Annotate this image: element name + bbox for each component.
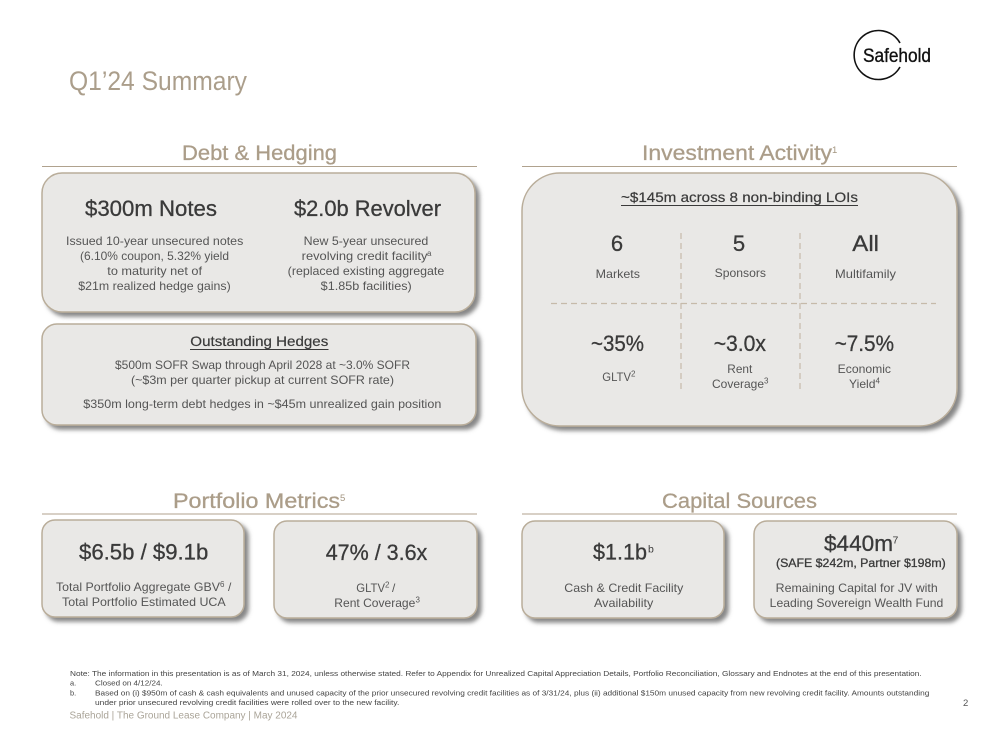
availability figure: $1.1b — [593, 540, 647, 564]
metric: economic yield: Economic — [838, 362, 891, 376]
JV description — [770, 581, 943, 610]
metric: rent coverage: 3 — [764, 376, 769, 386]
logo: Safehold: Safehold — [863, 46, 931, 67]
panel: notes and revolver — [42, 173, 475, 312]
GLTV description: Rent Coverage — [334, 596, 416, 610]
footnotes: b. — [70, 688, 76, 698]
metric: multifamily: All — [852, 231, 879, 256]
LOI heading: ~$145m across 8 non-binding LOIs — [621, 189, 858, 205]
panel: JV capital — [754, 521, 957, 618]
metric: GLTV: GLTV — [602, 370, 631, 384]
revolver description: revolving credit facility — [302, 249, 428, 263]
GLTV description: 2 — [385, 580, 390, 590]
metric: markets — [596, 231, 640, 281]
footnotes: a. — [70, 678, 76, 688]
section heading: Portfolio Metrics: 5 — [340, 493, 345, 504]
revolver figure: $2.0b Revolver — [294, 196, 441, 221]
GLTV description: GLTV — [356, 581, 385, 595]
notes figure: $300m Notes — [85, 196, 217, 221]
GBV description — [56, 580, 232, 609]
JV figure: $440m — [824, 531, 893, 556]
section heading: Portfolio Metrics: Portfolio Metrics — [173, 490, 340, 513]
section heading: Portfolio Metrics — [42, 490, 477, 514]
footnotes — [70, 669, 929, 707]
metric: rent coverage: Coverage — [712, 377, 764, 391]
revolver description — [288, 234, 445, 293]
panel: GBV and UCA — [42, 520, 244, 617]
GBV description: 6 — [220, 580, 225, 589]
hedges text: (~$3m per quarter pickup at current SOFR rate) — [131, 373, 394, 387]
metric: economic yield — [835, 331, 894, 391]
section heading: Investment Activity: Investment Activity — [642, 142, 833, 165]
metric: markets: 6 — [611, 231, 623, 256]
JV split: (SAFE $242m, Partner $198m) — [776, 556, 946, 570]
notes description: to maturity net of — [107, 264, 203, 278]
section heading: Investment Activity — [522, 142, 957, 166]
notes description — [66, 234, 243, 293]
revolver description: a — [427, 249, 432, 258]
footer: Safehold | The Ground Lease Company | May 2024 — [70, 710, 298, 722]
metric: economic yield: 4 — [876, 376, 880, 386]
hedges text: $500m SOFR Swap through April 2028 at ~3.0% SOFR — [115, 358, 410, 372]
page number: 2 — [963, 698, 968, 709]
section heading: Debt & Hedging: Debt & Hedging — [182, 142, 337, 165]
notes description: $21m realized hedge gains) — [78, 279, 231, 293]
metric: GLTV — [591, 331, 644, 384]
GLTV figure: 47% / 3.6x — [326, 540, 427, 565]
JV figure: 7 — [892, 534, 898, 546]
JV description: Leading Sovereign Wealth Fund — [770, 596, 943, 610]
metric: GLTV: 2 — [631, 370, 636, 378]
metric: rent coverage: Rent — [727, 362, 753, 376]
hedges heading: Outstanding Hedges — [190, 333, 328, 349]
revolver description: (replaced existing aggregate — [288, 264, 445, 278]
footnotes: Based on (i) $950m of cash & cash equivalents and unused capacity of the prior unsecured revolving credit facilities as of 3/31/24, plus (ii) additional $150m unused capacity from new revolving credit facility. Amounts outstanding — [95, 688, 929, 698]
metric: rent coverage: ~3.0x — [714, 331, 766, 356]
GBV description: Total Portfolio Estimated UCA — [62, 595, 226, 609]
panel: GLTV and rent coverage — [274, 521, 477, 618]
panel: cash and credit availability — [522, 521, 724, 618]
panel: investment activity — [522, 173, 957, 426]
metric: GLTV: ~35% — [591, 331, 644, 356]
metric: markets: Markets — [596, 267, 640, 281]
metric: sponsors — [715, 231, 766, 280]
revolver description: $1.85b facilities) — [321, 279, 412, 293]
availability description: Cash & Credit Facility — [564, 581, 683, 595]
section heading: Capital Sources: Capital Sources — [662, 490, 817, 513]
panel: outstanding hedges — [42, 324, 476, 425]
availability figure: b — [648, 544, 654, 556]
footnotes: Note: The information in this presentation is as of March 31, 2024, unless otherwise stated. Refer to Appendix for Unrealized Capital Appreciation Details, Portfolio Reconciliation, Glossary and Endnotes at the end of this presentation. — [70, 669, 922, 678]
availability description — [564, 581, 683, 610]
metric: sponsors: Sponsors — [715, 266, 766, 280]
GLTV description — [334, 580, 420, 610]
metric: economic yield: ~7.5% — [835, 331, 894, 356]
revolver description: New 5-year unsecured — [304, 234, 428, 248]
hedges text: $350m long-term debt hedges in ~$45m unrealized gain position — [83, 397, 441, 411]
JV description: Remaining Capital for JV with — [776, 581, 938, 595]
metric: multifamily: Multifamily — [835, 267, 896, 281]
GBV description: / — [228, 580, 232, 594]
footnotes: Closed on 4/12/24. — [95, 678, 163, 688]
GBV description: Total Portfolio Aggregate GBV — [56, 580, 220, 594]
hedges text — [83, 358, 441, 411]
notes description: Issued 10-year unsecured notes — [66, 234, 243, 248]
footnotes: under prior unsecured revolving credit facilities were rolled over to the new facility. — [95, 698, 399, 707]
title: Q1’24 Summary — [69, 66, 247, 96]
GBV figure: $6.5b / $9.1b — [79, 540, 208, 564]
notes description: (6.10% coupon, 5.32% yield — [80, 249, 229, 263]
dashed grid — [551, 233, 936, 392]
availability description: Availability — [594, 596, 653, 610]
metric: multifamily — [835, 231, 896, 281]
metric: rent coverage — [712, 331, 769, 391]
logo: Safehold — [854, 30, 931, 80]
metric: sponsors: 5 — [733, 231, 745, 256]
GLTV description: 3 — [416, 596, 420, 604]
metric: economic yield: Yield — [849, 377, 876, 391]
section heading: Investment Activity: 1 — [832, 145, 837, 156]
GLTV description: / — [392, 581, 396, 595]
